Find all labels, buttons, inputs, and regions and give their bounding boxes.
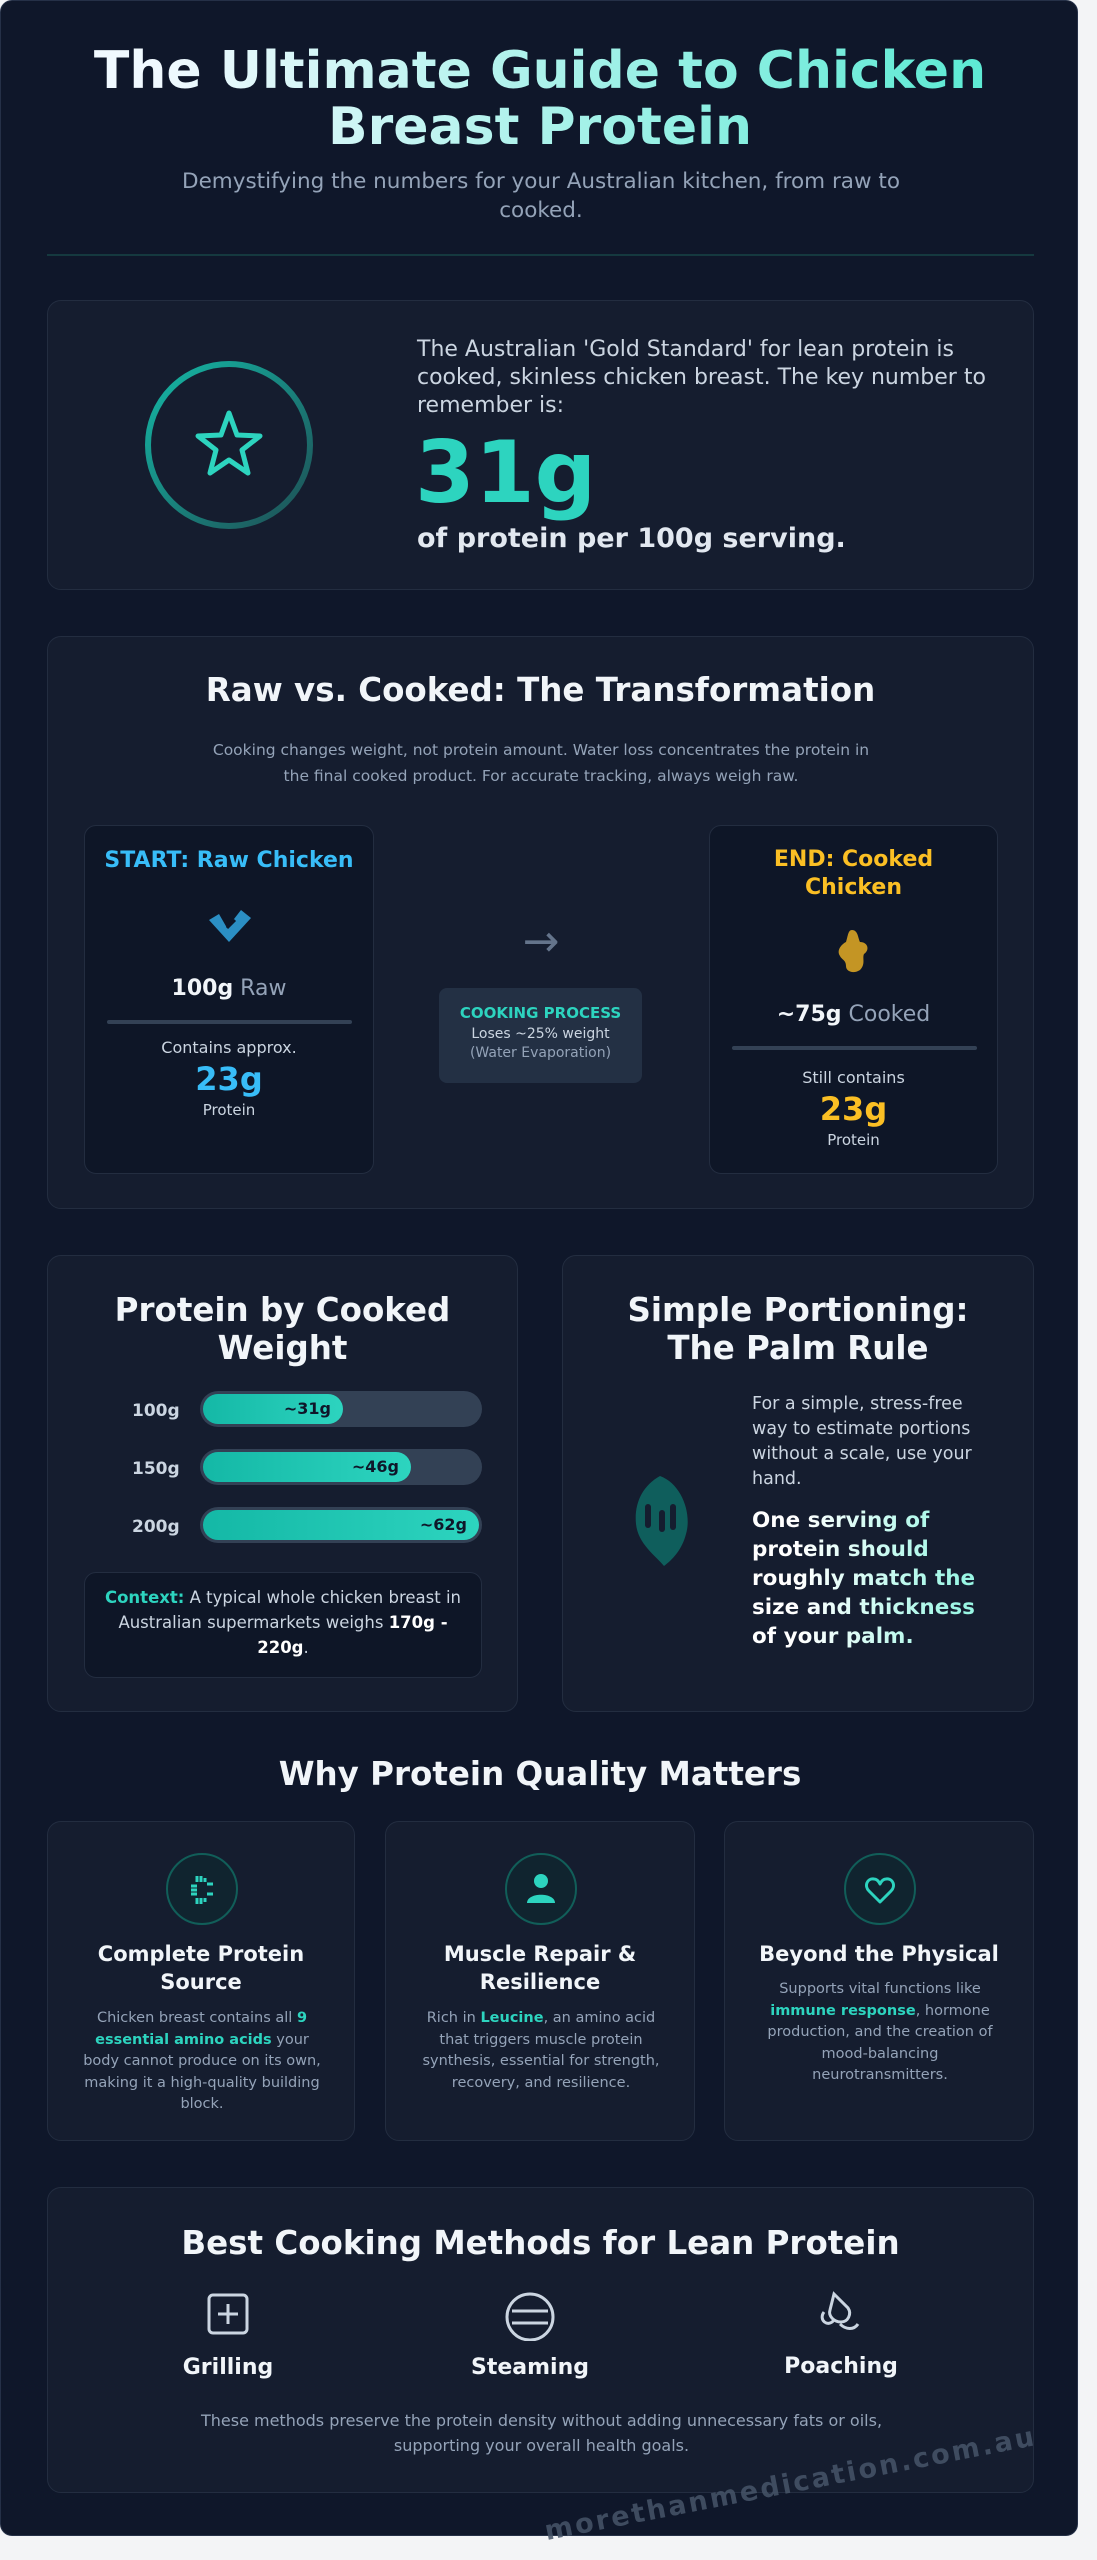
description: Cooking changes weight, not protein amount. Water loss concentrates the protein in the final cooked product. For accurate tracking, always weigh raw. [213,741,869,785]
icon: palm [636,1476,688,1566]
arrow: → [523,916,559,967]
panel: beyond physical: Beyond the Physical [759,1942,999,1966]
cooked box: Protein [827,1131,880,1149]
panel: muscle repair: Resilience [480,1970,600,1994]
context callout: Context: A typical whole chicken breast in Australian supermarkets weighs 170g - 220g. [105,1588,461,1657]
raw box: 100g Raw [172,976,286,1001]
bar chart: 100g [132,1401,180,1421]
bar chart: ~46g [352,1457,399,1476]
cooked box: Still contains [802,1068,905,1087]
heading: Weight [218,1329,347,1367]
method: poaching [784,2291,898,2379]
context callout [84,1572,482,1678]
heading [115,1291,450,1367]
panel: complete protein: Complete Protein [98,1942,304,1966]
text: palm description: For a simple, stress-free way to estimate portions without a scale, use your hand. [752,1394,972,1489]
panel: cooking methods [47,2187,1034,2493]
heading: Protein by Cooked [115,1291,450,1329]
raw box: Contains approx. [161,1038,297,1057]
heading: The Palm Rule [667,1329,929,1367]
panel: palm rule [562,1255,1034,1712]
raw box [84,825,374,1174]
cooking process box [439,988,642,1083]
big number: 31g [415,423,596,523]
heading: Best Cooking Methods for Lean Protein [181,2224,900,2262]
cooked box [709,825,998,1174]
cooked box: Chicken [805,875,902,900]
cooked box: ~75g Cooked [777,1002,930,1027]
icon: person [505,1853,577,1925]
method: grilling: Grilling [183,2355,273,2380]
bar chart [132,1391,482,1543]
method: poaching: Poaching [784,2354,898,2379]
panel: muscle repair: Muscle Repair & [444,1942,636,1966]
method: steaming [471,2292,589,2380]
method: grilling [183,2294,273,2380]
cooking process box: Loses ~25% weight [471,1026,610,1042]
icon: star circle [145,361,313,529]
panel: complete protein: Chicken breast contains all 9 essential amino acids your body cannot produce on its own, making it a high-quality building block. [83,2010,321,2112]
text: methods note: These methods preserve the protein density without adding unnecessary fats or oils, supporting your overall health goals. [201,2411,882,2455]
icon: dna [166,1853,238,1925]
panel: raw vs cooked [47,636,1034,1209]
panel: muscle repair [385,1821,695,2141]
raw box: Protein [203,1101,255,1119]
heading: why protein quality: Why Protein Quality Matters [279,1755,801,1793]
icon: heart [844,1853,916,1925]
icon: cooked chicken [838,930,868,972]
bar chart: ~31g [284,1399,331,1418]
icon: raw chicken [209,910,251,942]
caption: of protein per 100g serving. [417,523,846,554]
panel: gold standard [47,300,1034,590]
title: Breast Protein [328,97,752,157]
panel: muscle repair: Rich in Leucine, an amino acid that triggers muscle protein synthesis, essential for strength, recovery, and resilience. [422,2010,660,2090]
text: gold standard: The Australian 'Gold Standard' for lean protein is cooked, skinless chicken breast. The key number to remember is: [417,337,986,418]
panel: complete protein [47,1821,355,2141]
panel: protein by cooked weight [47,1255,518,1712]
bar chart: 150g [132,1459,180,1479]
cooked box: END: Cooked [774,847,933,872]
panel: complete protein: Source [160,1970,242,1994]
panel: beyond physical: Supports vital functions like immune response, hormone production, and the creation of mood-balancing neurotransmitters. [767,1981,993,2083]
watermark: morethanmedication.com.au [542,2421,1039,2547]
cooking process box: COOKING PROCESS [460,1004,621,1022]
bar chart: 200g [132,1517,180,1537]
heading: Simple Portioning: [627,1291,969,1329]
title [1,43,1079,155]
cooking process box: (Water Evaporation) [470,1045,611,1061]
heading [627,1291,969,1367]
bar chart: ~62g [420,1515,467,1534]
raw box: 23g [195,1060,263,1098]
cooked box: 23g [820,1090,887,1128]
panel: beyond physical [724,1821,1034,2141]
heading: Raw vs. Cooked: The Transformation [206,671,875,709]
raw box: START: Raw Chicken [104,848,354,873]
subtitle: Demystifying the numbers for your Australian kitchen, from raw to cooked. [182,169,900,223]
title: The Ultimate Guide to Chicken [94,41,986,101]
method: steaming: Steaming [471,2355,589,2380]
text: palm rule: One serving of protein should roughly match the size and thickness of your palm. [752,1508,975,1649]
